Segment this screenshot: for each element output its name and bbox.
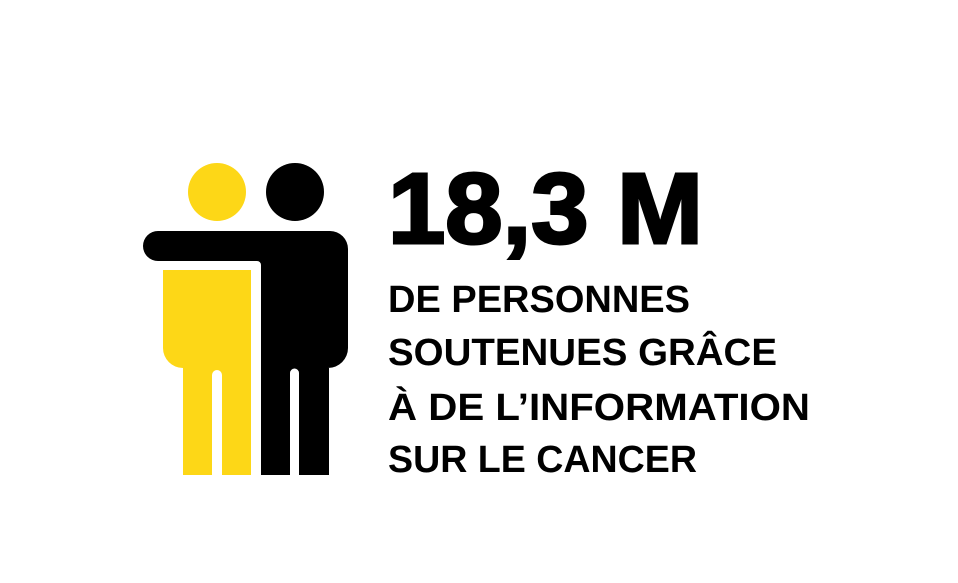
description text xyxy=(388,279,810,481)
description text: SUR LE CANCER xyxy=(388,439,697,481)
description text: À DE L’INFORMATION xyxy=(388,385,810,429)
description text: SOUTENUES GRÂCE xyxy=(388,330,777,374)
black person xyxy=(143,163,348,475)
icon: two people embracing xyxy=(143,163,348,475)
yellow person xyxy=(163,163,251,475)
description text: DE PERSONNES xyxy=(388,279,690,321)
big number: 18,3 M xyxy=(388,153,703,265)
